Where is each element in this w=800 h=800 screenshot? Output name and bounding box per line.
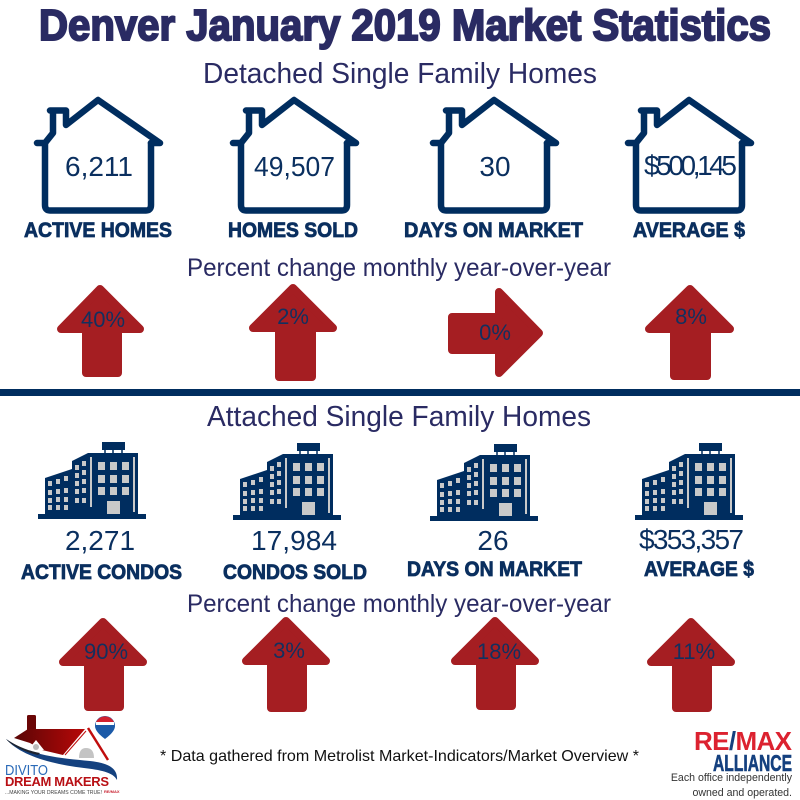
logo: Divito Dream Makers (5, 715, 120, 796)
stat: condos sold: CONDOS SOLD (223, 561, 367, 584)
arrow: condos sold up 3%: 3% (273, 638, 305, 663)
logo: RE/MAX Alliance: RE/MAX (694, 726, 793, 756)
stat: average price: AVERAGE $ (633, 219, 745, 242)
arrow: condos sold up 3% (246, 621, 326, 708)
arrow: condo days on market up 18%: 18% (477, 639, 521, 664)
stat: condo average price: AVERAGE $ (644, 558, 754, 581)
stat: homes sold (228, 100, 358, 242)
stat: homes sold: 49,507 (254, 151, 335, 182)
disclaimer: owned and operated. (692, 787, 792, 799)
stat: active condos (21, 442, 182, 584)
stat: active condos: ACTIVE CONDOS (21, 561, 182, 584)
stat: days on market: 30 (479, 151, 511, 182)
arrow: active condos up 90% (63, 622, 143, 707)
arrow: average price up 8% (649, 289, 730, 376)
stat: active condos: 2,271 (65, 525, 135, 556)
logo: Divito Dream Makers: DIVITO (5, 763, 48, 779)
arrow: active homes up 40%: 40% (81, 307, 125, 332)
stat: condo average price (635, 443, 754, 581)
arrow: active homes up 40% (61, 289, 140, 373)
arrow: condo average price up 11%: 11% (673, 639, 715, 664)
stat: active homes: 6,211 (65, 151, 133, 182)
arrow: condo days on market up 18% (455, 621, 535, 706)
arrow: days on market flat 0%: 0% (479, 320, 511, 345)
stat: condos sold: 17,984 (251, 525, 337, 556)
heading: attached homes: Attached Single Family Homes (207, 401, 591, 433)
subheading: percent change detached: Percent change monthly year-over-year (187, 254, 611, 282)
stat: condo days on market: DAYS ON MARKET (407, 558, 582, 581)
disclaimer: Each office independently (671, 772, 793, 784)
logo: Divito Dream Makers: ...MAKING YOUR DREAMS COME TRUE! (5, 790, 102, 796)
arrow: days on market flat 0% (452, 292, 539, 373)
arrow: average price up 8%: 8% (675, 304, 707, 329)
stat: condo days on market: 26 (477, 525, 509, 556)
stat: days on market: DAYS ON MARKET (404, 219, 583, 242)
logo: RE/MAX Alliance (694, 726, 793, 776)
stat: active homes (24, 100, 172, 242)
stat: condo average price: $353,357 (639, 524, 744, 555)
stat: active homes: ACTIVE HOMES (24, 219, 172, 242)
stat: condos sold (223, 443, 367, 584)
stat: average price: $500,145 (644, 150, 737, 181)
subheading: percent change attached: Percent change monthly year-over-year (187, 590, 611, 618)
arrow: active condos up 90%: 90% (84, 639, 128, 664)
stat: days on market (404, 100, 583, 242)
arrow: homes sold up 2% (253, 288, 333, 377)
footnote: * Data gathered from Metrolist Market-Indicators/Market Overview * (160, 748, 639, 765)
stat: homes sold: HOMES SOLD (228, 219, 358, 242)
disclaimer (671, 772, 793, 799)
heading: detached homes: Detached Single Family Homes (203, 58, 597, 90)
logo: Divito Dream Makers: RE/MAX (104, 789, 120, 794)
arrow: condo average price up 11% (651, 622, 731, 708)
logo: Divito Dream Makers: DREAM MAKERS (5, 774, 109, 789)
stat: average price (628, 100, 751, 242)
stat: condo days on market (407, 444, 582, 581)
arrow: homes sold up 2%: 2% (277, 304, 309, 329)
